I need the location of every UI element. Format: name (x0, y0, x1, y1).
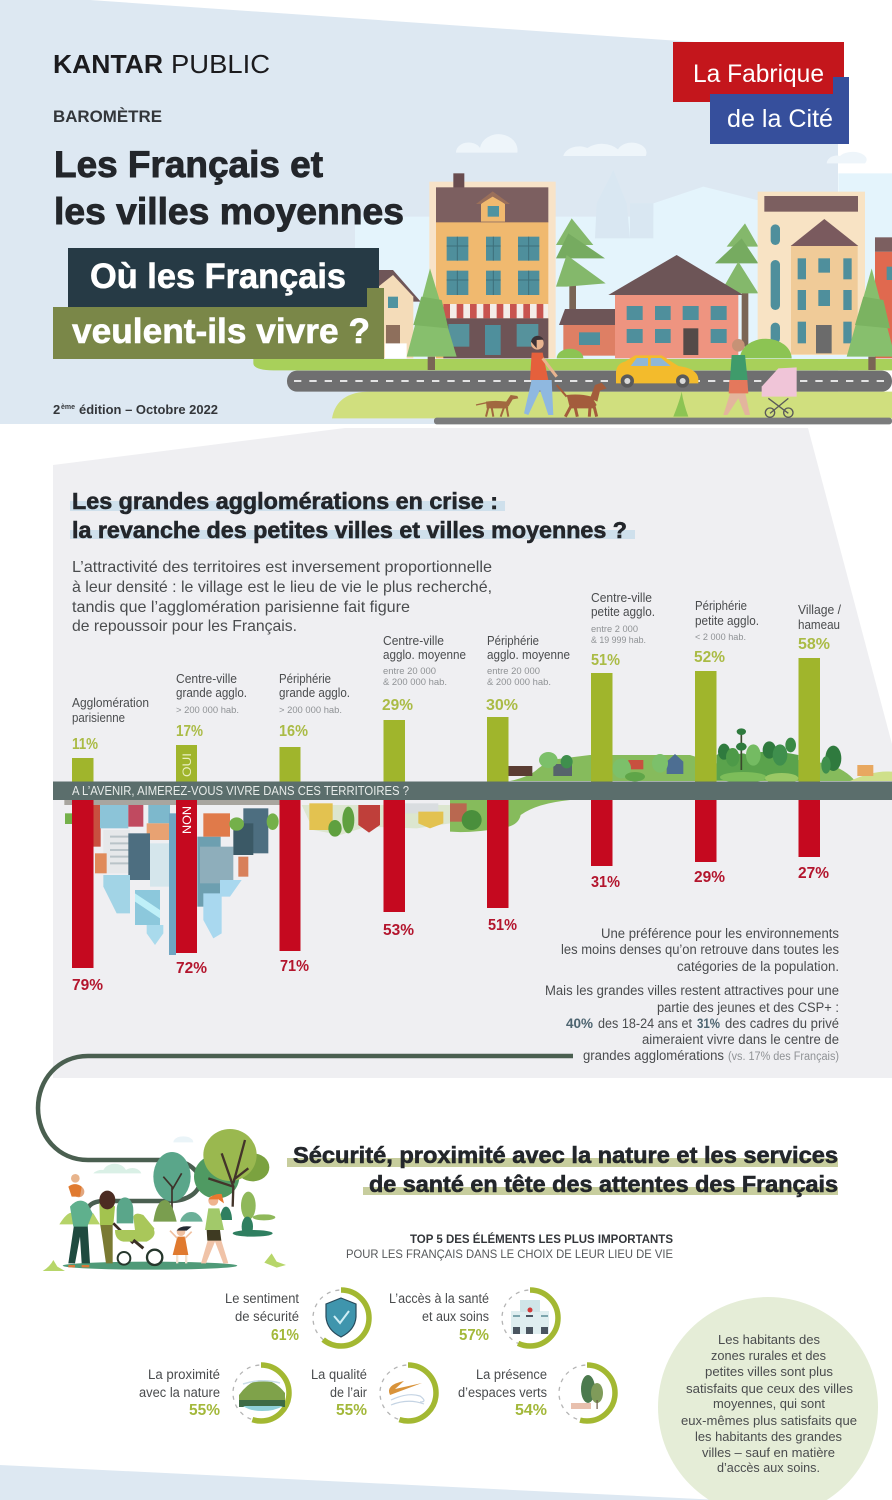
pine trees behind (556, 218, 758, 347)
icon: landscape (239, 1380, 285, 1411)
bar chart (53, 591, 892, 994)
text block: preference commentary: Mais les grandes villes restent attractives pour une (545, 983, 839, 998)
item: espaces verts 54%: La présence (476, 1367, 547, 1382)
text block: intro: de repoussoir pour les Français. (72, 618, 297, 635)
clouds (456, 134, 867, 163)
callout: satisfaction: les habitants des grandes (695, 1429, 842, 1444)
text block: preference commentary: catégories de la population. (677, 959, 839, 974)
text block: preference commentary: 31% (697, 1016, 720, 1031)
category labels: > 200 000 hab. (176, 705, 239, 716)
taxi (616, 355, 698, 388)
subtitle banner: veulent-ils vivre ? (72, 312, 370, 351)
text block: preference commentary: les moins denses qu’on retrouve dans toutes les (561, 942, 839, 957)
values: non (72, 865, 829, 994)
logo: Kantar Public (53, 49, 270, 79)
illustration: town street (253, 134, 892, 424)
mother (99, 1191, 133, 1263)
text block: preference commentary: aimeraient vivre dans le centre de (642, 1032, 839, 1047)
text block: preference commentary: 40% (566, 1016, 593, 1031)
values: oui: 58% (798, 636, 830, 653)
girl (170, 1226, 192, 1263)
values: oui: 11% (72, 736, 98, 753)
left house (370, 270, 421, 358)
woman with stroller (673, 339, 797, 417)
icon: paper plane and wind (389, 1381, 424, 1405)
heading: sécurité: Sécurité, proximité avec la nature et les services (293, 1142, 838, 1168)
values: non: 51% (488, 917, 517, 934)
subheading: top 5 (346, 1231, 673, 1261)
callout: satisfaction: petites villes sont plus (705, 1364, 834, 1379)
question band (53, 782, 892, 800)
label: Baromètre: BAROMÈTRE (53, 107, 162, 126)
category labels: > 200 000 hab. (279, 705, 342, 716)
item: sécurité 61%: 61% (271, 1327, 299, 1344)
edition line: édition – Octobre 2022 (79, 402, 218, 417)
heading: sécurité: de santé en tête des attentes des Français (369, 1171, 838, 1197)
item: santé 57%: L’accès à la santé (389, 1291, 489, 1306)
icon: hospital (511, 1300, 549, 1334)
item: nature 55% (139, 1365, 289, 1421)
illustration: countryside above the band (508, 728, 892, 784)
woman (201, 1194, 228, 1263)
values: oui: 29% (382, 697, 413, 714)
callout: satisfaction: Les habitants des (718, 1332, 820, 1347)
values: oui: 52% (694, 649, 725, 666)
callout: satisfaction (658, 1297, 878, 1500)
item: nature 55%: avec la nature (139, 1385, 220, 1400)
header panel background (0, 0, 892, 424)
woman with dogs (476, 336, 607, 417)
category labels: & 200 000 hab. (487, 677, 551, 688)
category labels: parisienne (72, 711, 125, 725)
text block: preference commentary: des 18-24 ans et (598, 1016, 692, 1031)
edition line: ème (61, 404, 75, 411)
category labels: & 200 000 hab. (383, 677, 447, 688)
heading: grandes agglomérations: la revanche des petites villes et villes moyennes ? (72, 517, 627, 543)
bottom strip (0, 1465, 720, 1500)
item: espaces verts 54% (458, 1365, 615, 1421)
values: non: 79% (72, 977, 103, 994)
values: oui: 30% (486, 697, 518, 714)
text block: preference commentary: grandes agglomérations (583, 1048, 724, 1063)
callout: satisfaction: satisfaits que ceux des villes (686, 1381, 854, 1396)
main title (54, 144, 404, 232)
stroller (115, 1214, 162, 1265)
values: oui: 17% (176, 723, 203, 740)
text block: intro: L’attractivité des territoires est inversement proportionnelle (72, 559, 492, 576)
item: santé 57%: 57% (459, 1327, 489, 1344)
item: santé 57%: et aux soins (422, 1309, 489, 1324)
text block: intro (72, 559, 492, 635)
category labels: Centre-ville (591, 591, 652, 605)
ground and road (253, 359, 892, 424)
item: sécurité 61% (225, 1290, 369, 1346)
category labels: Centre-ville (383, 634, 444, 648)
category labels: petite agglo. (591, 605, 655, 619)
category labels: < 2 000 hab. (695, 632, 746, 643)
values: oui: 16% (279, 723, 308, 740)
logo: La Fabrique de la Cité: de la Cité (727, 105, 833, 133)
category labels: entre 20 000 (487, 666, 540, 677)
question band: A L’AVENIR, AIMEREZ-VOUS VIVRE DANS CES TERRITOIRES ? (72, 784, 409, 798)
main title: les villes moyennes (54, 191, 404, 232)
callout: satisfaction: d’accès aux soins. (717, 1460, 820, 1475)
logo: Kantar Public: PUBLIC (171, 49, 270, 79)
logo: La Fabrique de la Cité: La Fabrique (693, 60, 824, 88)
item: air 55%: 55% (336, 1402, 367, 1419)
father with child (68, 1174, 93, 1267)
cream building (758, 192, 865, 355)
main title: Les Français et (54, 144, 323, 185)
callout: satisfaction: moyennes, qui sont (713, 1396, 825, 1411)
category labels: Périphérie (487, 634, 539, 648)
values: oui: 51% (591, 652, 620, 669)
subtitle banner: Où les Français (90, 257, 346, 296)
category labels: Centre-ville (176, 672, 237, 686)
logo: Kantar Public: KANTAR (53, 49, 163, 79)
illustration: family in a park (43, 1129, 286, 1271)
apartment building (429, 173, 556, 358)
item: nature 55%: 55% (189, 1402, 220, 1419)
values: non: 71% (280, 958, 309, 975)
callout: satisfaction: eux-mêmes plus satisfaits que (681, 1413, 857, 1428)
heading: sécurité (287, 1142, 838, 1197)
category labels: Agglomération (72, 696, 149, 710)
front trees (407, 268, 892, 370)
item: air 55%: La qualité (311, 1367, 367, 1382)
category labels: Périphérie (279, 672, 331, 686)
item: air 55%: de l’air (330, 1385, 367, 1400)
item: espaces verts 54%: 54% (515, 1402, 547, 1419)
text block: preference commentary: partie des jeunes et des CSP+ : (657, 1000, 839, 1015)
text block: preference commentary (545, 926, 839, 1063)
item: air 55% (311, 1365, 436, 1421)
values: oui (72, 636, 830, 753)
item: santé 57% (389, 1290, 558, 1346)
callout: satisfaction: zones rurales et des (711, 1348, 826, 1363)
values: non: 72% (176, 960, 207, 977)
subheading: top 5: POUR LES FRANÇAIS DANS LE CHOIX DE LEUR LIEU DE VIE (346, 1247, 673, 1261)
category labels: agglo. moyenne (487, 648, 570, 662)
heading: grandes agglomérations: Les grandes agglomérations en crise : (72, 488, 498, 514)
values: non: 29% (694, 869, 725, 886)
category labels: grande agglo. (279, 686, 350, 700)
category labels: agglo. moyenne (383, 648, 466, 662)
item: sécurité 61%: de sécurité (235, 1309, 299, 1324)
category labels (72, 591, 842, 725)
category labels: Périphérie (695, 599, 747, 613)
illustration: hill below the band, right (450, 800, 570, 832)
category labels: Village / (798, 603, 842, 617)
text block: preference commentary: (vs. 17% des Français) (728, 1051, 839, 1063)
values: non: 31% (591, 874, 620, 891)
item: sécurité 61%: Le sentiment (225, 1291, 299, 1306)
category labels: grande agglo. (176, 686, 247, 700)
axis labels oui non (180, 753, 194, 834)
far right building (875, 237, 892, 358)
illustration: upside-down city and houses below the band (64, 800, 450, 955)
category labels: & 19 999 hab. (591, 635, 646, 646)
category labels: petite agglo. (695, 614, 759, 628)
edition line: 2 (53, 402, 60, 417)
axis labels oui non: OUI (180, 753, 194, 777)
text block: intro: tandis que l’agglomération parisienne fait figure (72, 599, 410, 616)
bars: non (72, 800, 820, 968)
heading: grandes agglomérations (70, 488, 635, 543)
panel: chart section background (53, 428, 892, 1078)
axis labels oui non: NON (180, 806, 194, 834)
text block: preference commentary: des cadres du privé (725, 1016, 839, 1031)
icon: shield (326, 1298, 356, 1337)
item: nature 55%: La proximité (148, 1367, 220, 1382)
category labels: hameau (798, 618, 840, 632)
bars: oui (72, 658, 820, 782)
values: non: 53% (383, 922, 414, 939)
values: non: 27% (798, 865, 829, 882)
callout: satisfaction: villes – sauf en matière (702, 1445, 835, 1460)
text block: preference commentary: Une préférence pour les environnements (601, 926, 839, 941)
pink house (559, 255, 743, 358)
logo: La Fabrique de la Cité (673, 42, 849, 144)
subtitle banner (53, 248, 384, 359)
text block: intro: à leur densité : le village est le lieu de vie le plus recherché, (72, 579, 492, 596)
category labels: entre 20 000 (383, 666, 436, 677)
connector line (38, 1056, 573, 1208)
item: espaces verts 54%: d’espaces verts (458, 1385, 547, 1400)
subheading: top 5: TOP 5 DES ÉLÉMENTS LES PLUS IMPORTANTS (410, 1231, 673, 1246)
icon: trees and bench (571, 1375, 603, 1409)
category labels: entre 2 000 (591, 624, 638, 635)
